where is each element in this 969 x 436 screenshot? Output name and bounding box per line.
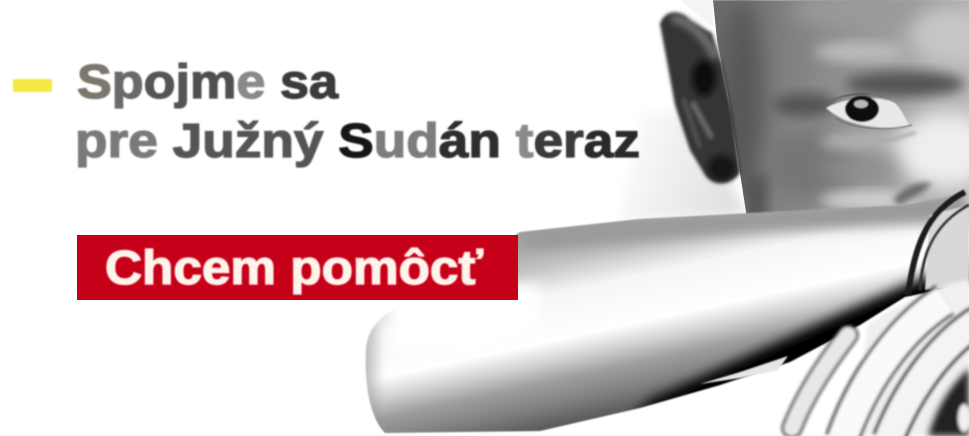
finger 1 (792, 335, 848, 428)
button label: Chcem pomôcť (105, 242, 483, 295)
yellow dash (13, 79, 52, 92)
finger 3 (888, 320, 969, 436)
finger 2 (842, 300, 945, 436)
white notch above ear (680, 0, 713, 27)
button (77, 235, 518, 300)
bracelets (908, 192, 969, 295)
backdrop behind the child (620, 112, 748, 222)
button background (77, 235, 518, 300)
gap highlight under arm (700, 356, 788, 384)
ear (660, 12, 740, 183)
heading line 2: pre Južný Sudán teraz (75, 115, 640, 168)
eye (826, 94, 916, 142)
heading line 1: Spojme sa (77, 56, 338, 109)
photo: child's face and arm (350, 0, 969, 436)
face (705, 0, 969, 230)
hand and fingers (792, 280, 969, 436)
arm (350, 180, 969, 436)
